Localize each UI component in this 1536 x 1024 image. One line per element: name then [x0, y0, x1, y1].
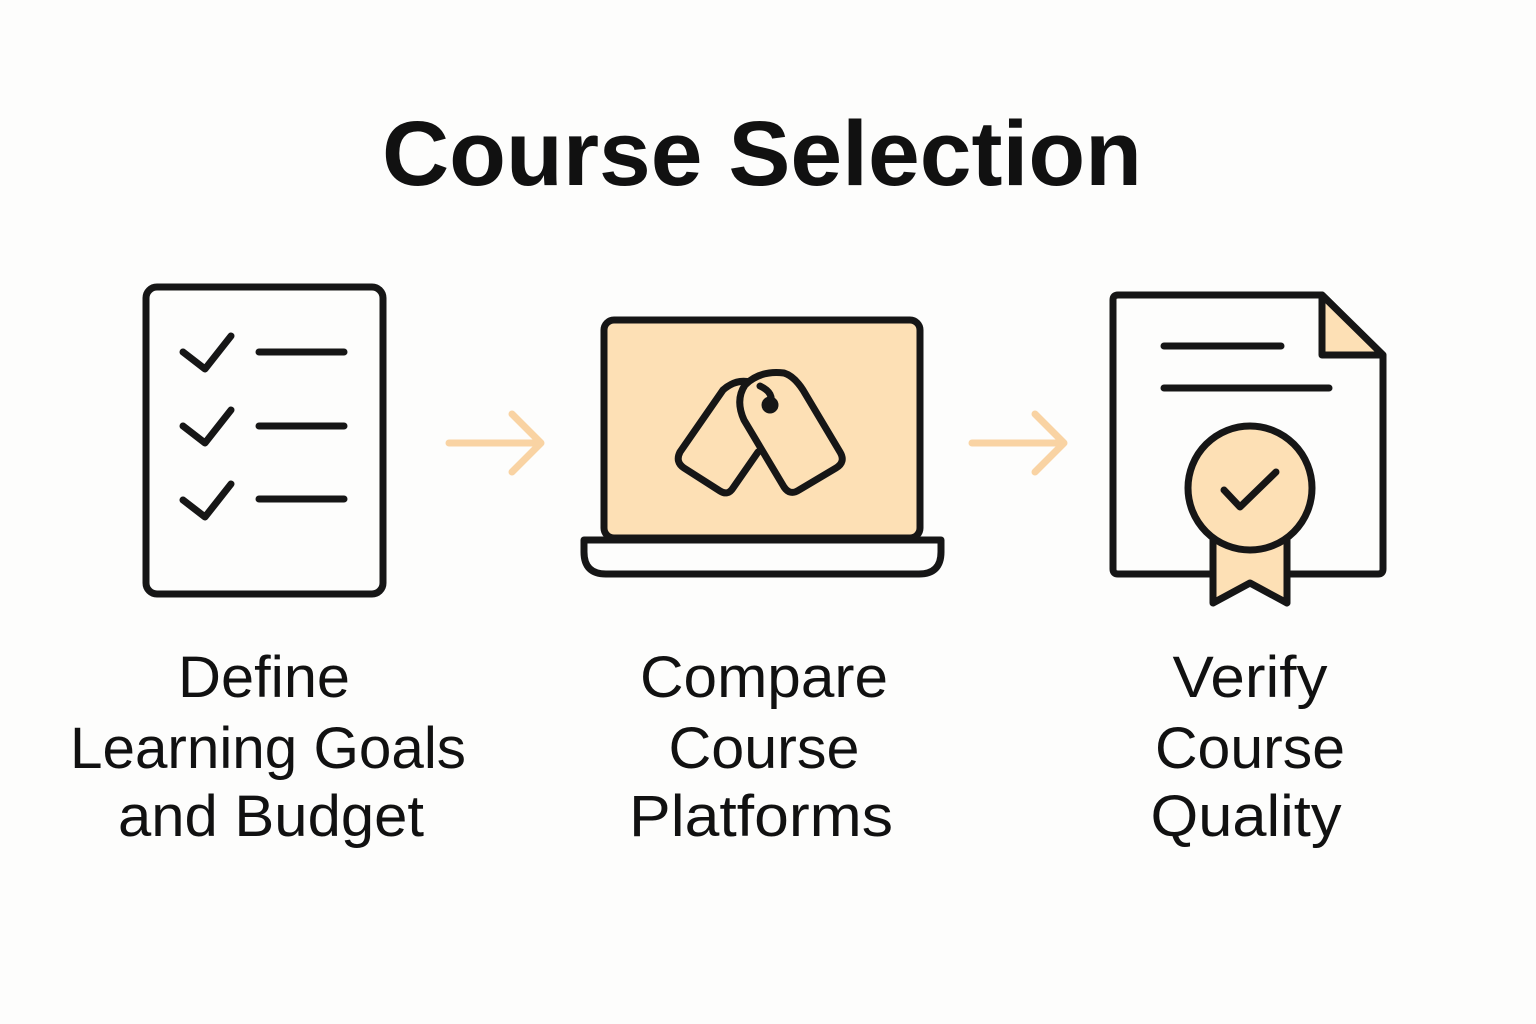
- icon: laptop with tags: [584, 320, 941, 574]
- label: step 1: [70, 645, 466, 849]
- label: step 1: and Budget: [118, 784, 424, 849]
- title: Course Selection: [382, 103, 1142, 205]
- label: step 2: [629, 645, 893, 849]
- arrow 2: [972, 414, 1064, 472]
- arrow 1: [449, 414, 541, 472]
- icon: checklist: [146, 287, 383, 594]
- label: step 2: Platforms: [629, 784, 893, 849]
- label: step 1: Learning Goals: [70, 716, 466, 781]
- label: step 3: Course: [1155, 716, 1345, 781]
- icon: certificate: [1113, 295, 1383, 603]
- label: step 2: Course: [668, 716, 860, 781]
- label: step 2: Compare: [640, 645, 888, 710]
- label: step 1: Define: [178, 645, 350, 710]
- label: step 3: Verify: [1172, 645, 1328, 710]
- label: step 3: [1150, 645, 1345, 849]
- label: step 3: Quality: [1150, 784, 1342, 849]
